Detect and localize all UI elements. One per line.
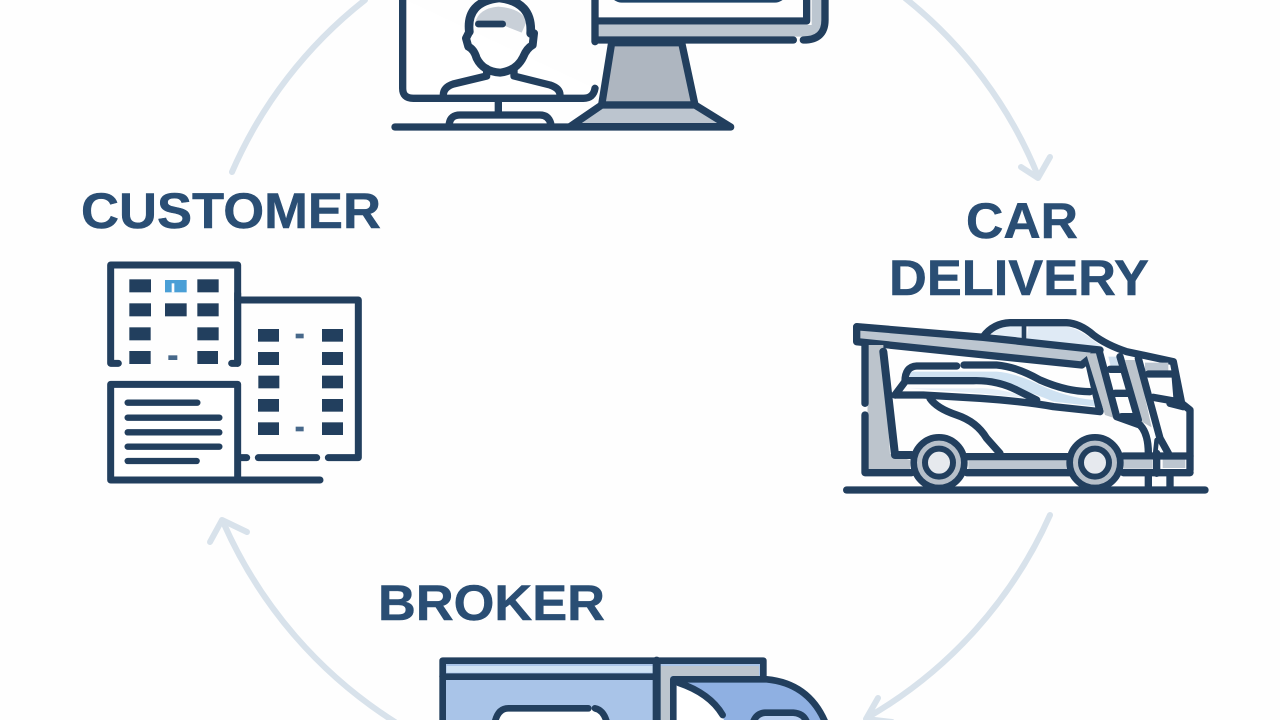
chassis bbox=[968, 461, 1067, 470]
video call window bbox=[403, 0, 595, 98]
icon: car transporter truck bbox=[847, 323, 1205, 490]
cargo window bbox=[495, 708, 607, 720]
light blue body bands bbox=[910, 372, 1097, 407]
icon: video call monitor with person bbox=[395, 0, 825, 127]
rear post bbox=[867, 345, 910, 470]
icon: office buildings and document bbox=[111, 265, 358, 480]
cab pillars and windows bbox=[1086, 353, 1115, 418]
heading: car delivery bbox=[889, 193, 1149, 306]
heading: customer: CUSTOMER bbox=[81, 183, 381, 239]
desk line bbox=[395, 116, 731, 138]
wheels bbox=[914, 438, 1120, 488]
heading: car delivery: CAR bbox=[966, 193, 1078, 249]
arrow: bottom-left arc to customer bbox=[210, 520, 395, 720]
truck cab bbox=[673, 679, 833, 720]
arrow: bottom-right arc to broker bbox=[866, 515, 1050, 720]
arrow: top-right arc to car delivery bbox=[905, 0, 1050, 178]
icon: delivery truck bbox=[443, 661, 833, 720]
cab and car roof bbox=[990, 325, 1022, 340]
document bbox=[111, 384, 238, 480]
windows bbox=[129, 279, 343, 435]
ground line bbox=[847, 479, 1205, 501]
monitor stand bbox=[602, 43, 695, 105]
heading: broker: BROKER bbox=[378, 575, 605, 631]
upper beam bbox=[857, 327, 1100, 365]
heading: car delivery: DELIVERY bbox=[889, 250, 1149, 306]
arrow: top-left arc from customer to platform bbox=[232, 0, 365, 172]
